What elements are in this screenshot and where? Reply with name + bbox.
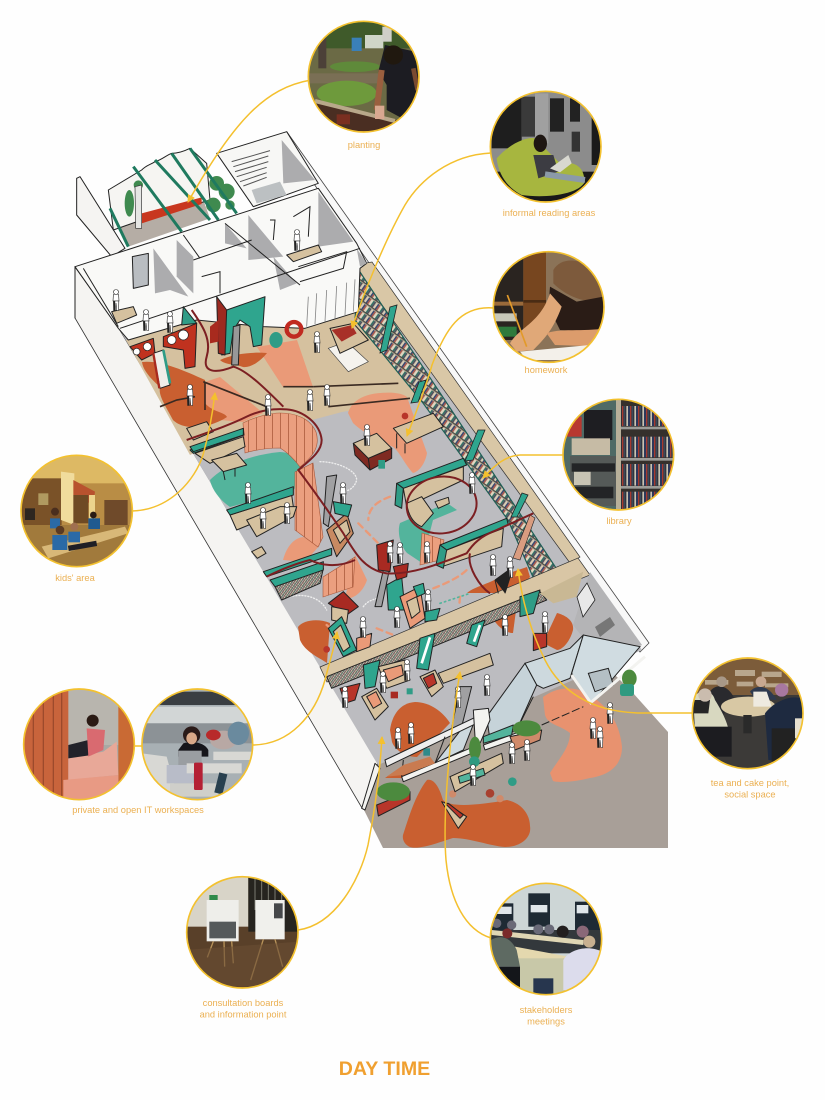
upper room (217, 132, 318, 207)
connector: consultation boards (298, 737, 382, 930)
ground floor rooms (75, 188, 367, 340)
connector: library (483, 455, 563, 478)
strip along left (190, 428, 243, 452)
label: informal reading areas: informal reading areas (503, 208, 596, 218)
label: stakeholders meetings: stakeholders (520, 1005, 573, 1015)
label: stakeholders meetings: meetings (527, 1016, 565, 1026)
floor colour patches (142, 340, 573, 778)
booths (327, 502, 440, 657)
benches (442, 753, 503, 828)
terrace back wall (108, 148, 210, 230)
folded wall (307, 279, 355, 327)
glass box white base (572, 657, 645, 703)
teal bench strip (190, 428, 244, 453)
connector: planting (188, 80, 311, 202)
terrace floor (110, 200, 210, 247)
reading platform and rug (328, 342, 368, 372)
photo: planting (308, 20, 420, 133)
round help desk (407, 497, 433, 527)
connector: between IT photos (134, 745, 142, 747)
dashed floor routes (290, 462, 470, 635)
photo: consultation boards (185, 875, 300, 990)
terrace planting (125, 176, 235, 217)
right outer wall top (282, 132, 649, 652)
label: consultation boards and information point: and information point (200, 1010, 287, 1020)
shelving under beam (327, 592, 547, 688)
connector: homework (407, 308, 494, 436)
orange steps (160, 382, 410, 410)
small left wall (77, 177, 125, 257)
salmon curtains (243, 413, 444, 597)
photo: library (562, 398, 676, 512)
connector: kids' area (132, 393, 215, 511)
desks (340, 633, 547, 720)
outdoor orange patch (403, 780, 530, 848)
play structures (130, 338, 155, 360)
main hall furniture (187, 409, 533, 657)
outdoor ground (363, 660, 668, 848)
back desks (287, 245, 322, 262)
maroon track back (192, 310, 283, 407)
label: library: library (606, 516, 632, 526)
library shelving along right side (355, 262, 580, 577)
label: homework: homework (525, 365, 568, 375)
window sill white bands (402, 748, 472, 782)
tables (212, 413, 513, 593)
isometric building cutaway (75, 132, 668, 848)
front section (327, 572, 645, 828)
low desk (187, 422, 213, 440)
connector: informal reading areas (352, 153, 491, 328)
tall column (452, 687, 472, 728)
stools and boxes (391, 688, 517, 802)
maroon track main hall (187, 409, 533, 593)
back rooms and terrace (75, 132, 410, 453)
photo: kids' area (20, 453, 133, 568)
planters (377, 670, 637, 816)
front beam (320, 558, 590, 682)
label: kids' area: kids' area (55, 573, 96, 583)
photo: informal reading areas (488, 90, 605, 205)
left outer wall (75, 267, 378, 808)
columns (323, 475, 390, 607)
photo: stakeholders meetings (488, 882, 603, 997)
glass facade (385, 635, 640, 777)
photo: tea and cake point (690, 657, 807, 770)
ring chair (287, 322, 301, 337)
title: DAY TIME (339, 1058, 430, 1080)
label: private and open IT workspaces: private and open IT workspaces (72, 805, 204, 815)
pergola beams (110, 148, 237, 247)
small stool (323, 646, 330, 653)
tan floor at the back (126, 267, 426, 455)
wall end (362, 763, 380, 810)
connector: IT workspaces (252, 632, 337, 745)
teal doors (363, 590, 540, 688)
label: consultation boards and information point: consultation boards (203, 998, 284, 1008)
main floor (118, 268, 642, 765)
people (113, 230, 613, 786)
connector: stakeholders meetings (445, 672, 491, 938)
photo: open IT workspace (140, 688, 255, 802)
outdoor salmon patch (543, 688, 622, 782)
front right grey wall with frames (573, 572, 642, 663)
label: tea and cake point, social space: social space (724, 790, 776, 800)
photo: homework (490, 250, 607, 367)
dashed facade line (542, 707, 583, 725)
label: tea and cake point, social space: tea and cake point, (711, 778, 789, 788)
partitions with shelving (190, 428, 508, 600)
label: planting: planting (348, 140, 380, 150)
connector: tea and cake point (518, 569, 693, 713)
photo: private IT workspace (23, 688, 138, 802)
